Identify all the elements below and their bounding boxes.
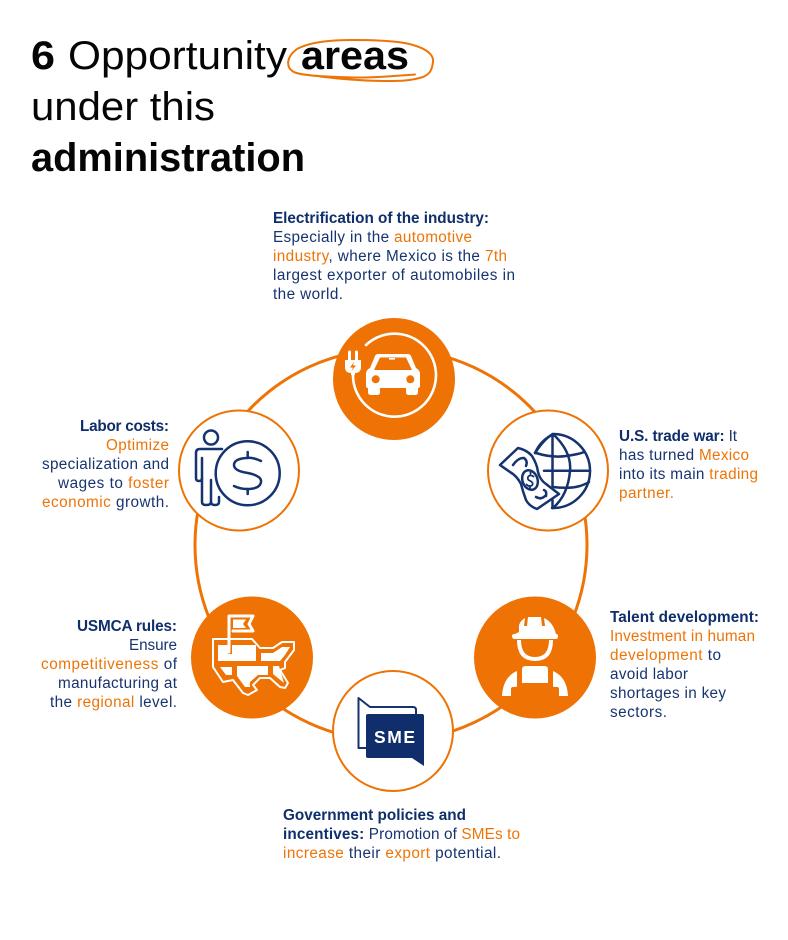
text: USMCA rules: Ensure (129, 637, 177, 654)
text: labor costs: wages to foster (57, 475, 169, 492)
title (31, 34, 409, 180)
text: government policies (283, 807, 520, 862)
text: electrification: Especially in the automotive (273, 229, 472, 246)
text: labor costs: Optimize (106, 437, 169, 454)
text: U.S. trade war: into its main trading (619, 466, 758, 483)
node: USMCA (191, 596, 313, 718)
text: USMCA rules: manufacturing at (58, 675, 178, 692)
text: talent development: shortages in key (610, 685, 726, 702)
node: labor (179, 410, 299, 530)
text: USMCA rules: competitiveness of (41, 656, 178, 673)
text: USMCA rules: the regional level. (50, 694, 177, 711)
text: electrification: largest exporter of automobiles in (273, 267, 515, 284)
hand-drawn ellipse around areas (288, 40, 433, 81)
text: U.S. trade war: U.S. trade war: It (619, 428, 738, 445)
text: talent development (610, 609, 759, 721)
icon: person with dollar (196, 430, 280, 505)
icon: worker (502, 617, 568, 696)
node: SME (333, 671, 453, 791)
title: administration (31, 136, 305, 180)
title: areas (301, 34, 409, 78)
text: talent development: development to (610, 647, 721, 664)
text: labor costs: economic growth. (42, 494, 169, 511)
node: talent (474, 596, 596, 718)
node: electrification (333, 318, 455, 440)
text: U.S. trade war (619, 428, 758, 502)
text: USMCA rules (41, 618, 178, 711)
text: USMCA rules: USMCA rules: (77, 618, 177, 635)
text: U.S. trade war: partner. (619, 485, 674, 502)
text: electrification: Electrification of the industry: (273, 210, 489, 227)
text: electrification: the world. (273, 286, 343, 303)
text: labor costs (42, 418, 169, 511)
node: trade war (488, 410, 608, 530)
text: talent development: sectors. (610, 704, 667, 721)
text: government policies: Government policies and (283, 807, 466, 824)
text: U.S. trade war: has turned Mexico (619, 447, 749, 464)
icon: SME chat bubble: SME (374, 727, 415, 747)
text: labor costs: Labor costs: (80, 418, 169, 435)
text: electrification: industry, where Mexico is the 7th (273, 248, 507, 265)
text: talent development: Talent development: (610, 609, 759, 626)
text: talent development: avoid labor (610, 666, 688, 683)
title: under this (31, 85, 215, 129)
title: Opportunity (68, 34, 287, 78)
text: government policies: increase their export potential. (283, 845, 501, 862)
icon: electric car (345, 334, 436, 417)
text: government policies: incentives: Promotion of SMEs to (283, 826, 520, 843)
icon: North America map with flag (213, 616, 294, 695)
text: labor costs: specialization and (42, 456, 169, 473)
text: electrification (273, 210, 515, 303)
connecting ring (195, 349, 587, 741)
title: 6 (31, 34, 55, 78)
text: talent development: Investment in human (610, 628, 755, 645)
icon: globe and money (500, 434, 590, 509)
